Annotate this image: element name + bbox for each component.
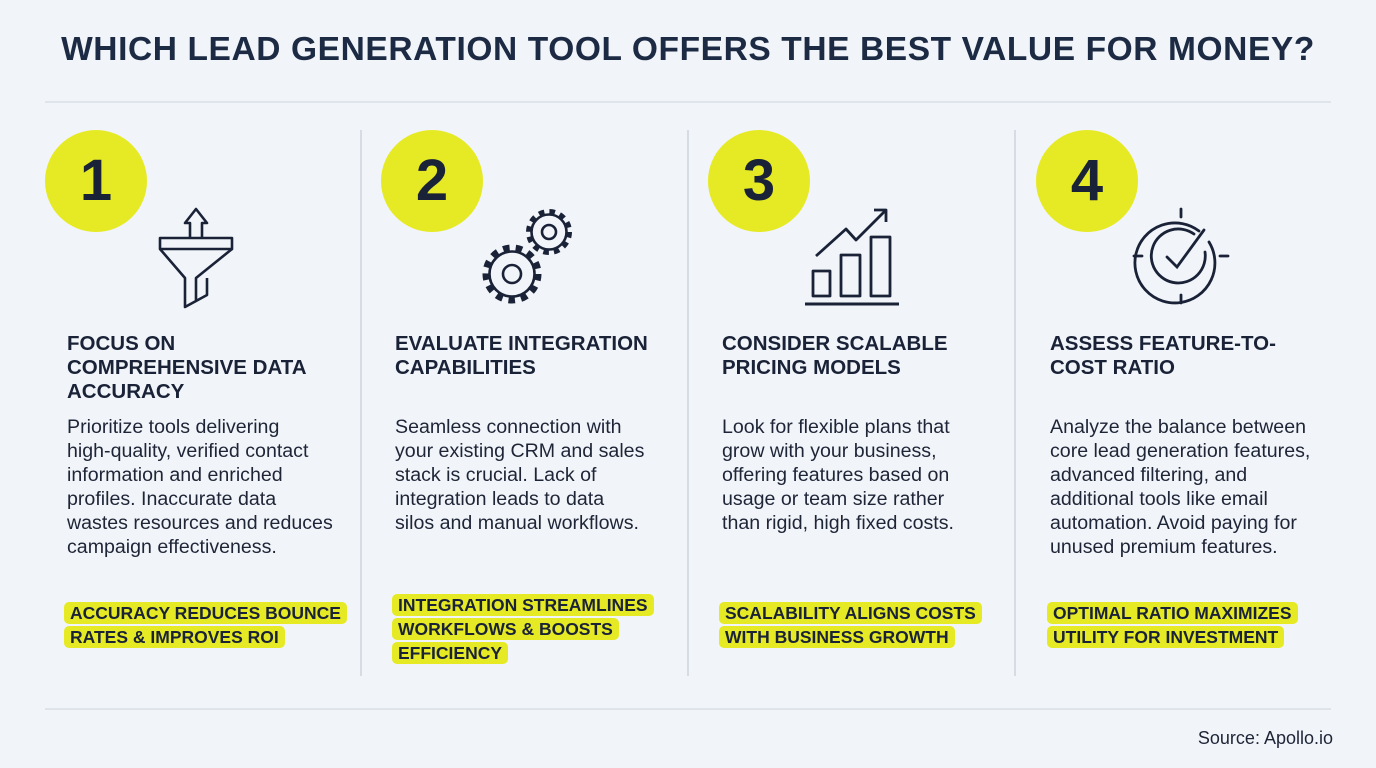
body text: silos and manual workflows. (395, 512, 639, 534)
body text: profiles. Inaccurate data (67, 488, 276, 510)
heading: CONSIDER SCALABLE (722, 332, 948, 355)
body text: Seamless connection with (395, 416, 622, 438)
source: Source: Apollo.io (1198, 728, 1333, 748)
body text: grow with your business, (722, 440, 937, 462)
callout: OPTIMAL RATIO MAXIMIZES (1053, 603, 1292, 623)
heading: PRICING MODELS (722, 356, 901, 379)
body text: unused premium features. (1050, 536, 1278, 558)
body text: stack is crucial. Lack of (395, 464, 596, 486)
number badge 4 (1036, 130, 1138, 232)
panel: integration (381, 130, 654, 664)
panel: feature-to-cost (1036, 130, 1310, 648)
number badge 2: 2 (416, 148, 448, 213)
icon: gears (482, 209, 572, 304)
body text: advanced filtering, and (1050, 464, 1247, 486)
heading: CAPABILITIES (395, 356, 536, 379)
body text (722, 416, 954, 534)
panel: scalable pricing (708, 130, 982, 648)
number badge 2 (381, 130, 483, 232)
heading: COST RATIO (1050, 356, 1175, 379)
body text (395, 416, 644, 534)
body text: your existing CRM and sales (395, 440, 644, 462)
heading (67, 332, 307, 403)
callout (64, 602, 347, 648)
number badge 1: 1 (80, 148, 112, 213)
callout: RATES & IMPROVES ROI (70, 627, 279, 647)
body text: automation. Avoid paying for (1050, 512, 1297, 534)
callout: UTILITY FOR INVESTMENT (1053, 627, 1278, 647)
body text: offering features based on (722, 464, 949, 486)
callout: SCALABILITY ALIGNS COSTS (725, 603, 976, 623)
icon: target check (1132, 208, 1230, 304)
number badge 4: 4 (1071, 148, 1103, 213)
body text: additional tools like email (1050, 488, 1268, 510)
body text: Prioritize tools delivering (67, 416, 279, 438)
heading: EVALUATE INTEGRATION (395, 332, 648, 355)
body text: information and enriched (67, 464, 283, 486)
callout: ACCURACY REDUCES BOUNCE (70, 603, 341, 623)
callout: WORKFLOWS & BOOSTS (398, 619, 613, 639)
panel: data accuracy (45, 130, 347, 648)
heading (395, 332, 648, 379)
callout: INTEGRATION STREAMLINES (398, 595, 648, 615)
body text (1050, 416, 1310, 558)
heading: ASSESS FEATURE-TO- (1050, 332, 1276, 355)
body text: integration leads to data (395, 488, 604, 510)
heading: FOCUS ON (67, 332, 175, 355)
title: WHICH LEAD GENERATION TOOL OFFERS THE BEST VALUE FOR MONEY? (61, 31, 1315, 68)
icon: funnel (158, 208, 234, 308)
callout (719, 602, 982, 648)
body text: Look for flexible plans that (722, 416, 950, 438)
body text: high-quality, verified contact (67, 440, 308, 462)
body text: usage or team size rather (722, 488, 944, 510)
callout: WITH BUSINESS GROWTH (725, 627, 949, 647)
heading: COMPREHENSIVE DATA (67, 356, 307, 379)
body text: core lead generation features, (1050, 440, 1310, 462)
body text: campaign effectiveness. (67, 536, 277, 558)
body text: than rigid, high fixed costs. (722, 512, 954, 534)
callout (1047, 602, 1298, 648)
number badge 3: 3 (743, 148, 775, 213)
heading (722, 332, 948, 379)
callout (392, 594, 654, 664)
icon: growth chart (805, 208, 899, 306)
body text (67, 416, 333, 558)
callout: EFFICIENCY (398, 643, 502, 663)
number badge 3 (708, 130, 810, 232)
heading: ACCURACY (67, 380, 184, 403)
number badge 1 (45, 130, 147, 232)
heading (1050, 332, 1276, 379)
body text: wastes resources and reduces (67, 512, 333, 534)
body text: Analyze the balance between (1050, 416, 1306, 438)
